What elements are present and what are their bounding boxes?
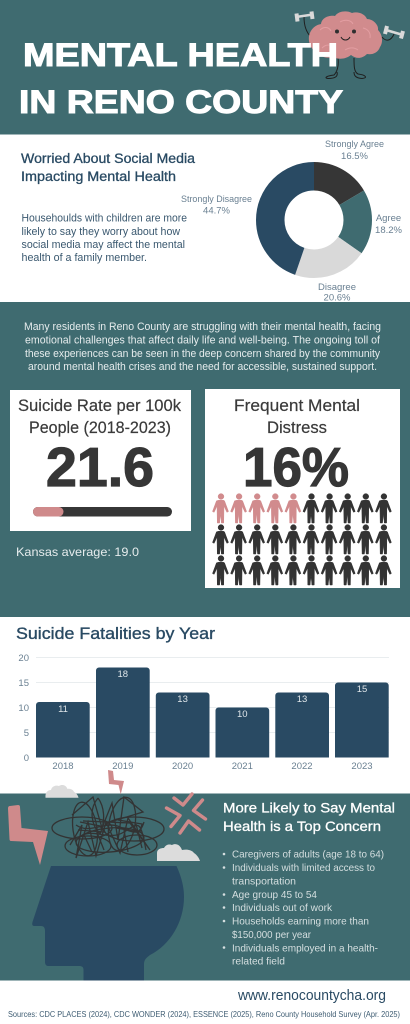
- Kansas average: Kansas average: 19.0: [16, 545, 139, 559]
- heading: top concern: More Likely to Say Mental: [223, 800, 395, 816]
- bar chart: 18: [118, 669, 128, 680]
- bar chart: [18, 653, 389, 772]
- intro paragraph: around mental health crises and the need for accessible, sustained support.: [28, 361, 377, 373]
- donut labels: Strongly Agree: [325, 139, 384, 150]
- website url: www.renocountycha.org: [237, 987, 386, 1004]
- bar chart: 20: [18, 653, 29, 664]
- panel: social media worry: [21, 139, 403, 304]
- donut labels: 18.2%: [375, 225, 403, 236]
- big number 16%: 16%: [243, 436, 349, 498]
- donut labels: [181, 139, 403, 304]
- progress bar: [33, 507, 172, 516]
- donut labels: Disagree: [318, 282, 356, 293]
- card: frequent mental distress: Frequent Mental: [234, 396, 360, 415]
- heading: social media: Impacting Mental Health: [21, 169, 176, 184]
- header band: [0, 0, 410, 134]
- bar chart: 2019: [112, 761, 133, 772]
- bar chart: 13: [297, 694, 307, 705]
- icon: head with scribble: [8, 770, 206, 980]
- intro paragraph: Many residents in Reno County are struggling with their mental health, facing: [24, 321, 381, 333]
- donut labels: 16.5%: [341, 151, 369, 162]
- bar chart: 10: [18, 703, 29, 714]
- pictogram: people: [212, 494, 391, 585]
- bulleted list: [223, 849, 384, 968]
- card: suicide rate: Suicide Rate per 100k: [18, 396, 181, 415]
- icon: brain with dumbbells: [296, 11, 403, 78]
- text: households with children: [22, 212, 187, 264]
- intro paragraph: [24, 321, 381, 373]
- head silhouette: [32, 866, 184, 980]
- bar chart: 2018: [52, 761, 74, 772]
- text: households with children: Househoulds with children are more: [22, 212, 187, 224]
- card: frequent mental distress: Distress: [267, 418, 327, 437]
- bar chart: 15: [18, 678, 29, 689]
- bar chart: 2021: [232, 761, 253, 772]
- icon: lightning top: [108, 770, 124, 794]
- card: frequent mental distress: [205, 389, 400, 588]
- heading: top concern: [223, 800, 395, 834]
- bar chart: 11: [58, 704, 68, 715]
- title: [19, 37, 343, 120]
- heading: social media: [21, 151, 196, 184]
- bulleted list: related field: [232, 956, 285, 968]
- bar chart: 2020: [172, 761, 193, 772]
- intro paragraph: these experiences can be seen in the deep concern shared by the community: [25, 348, 380, 360]
- heading: social media: Worried About Social Media: [21, 151, 196, 166]
- panel: top concern: [0, 770, 410, 980]
- bulleted list: Households earning more than: [232, 916, 369, 928]
- bulleted list: Age group 45 to 54: [232, 889, 317, 901]
- bulleted list: Individuals employed in a health-: [232, 942, 378, 954]
- donut chart: [270, 176, 358, 264]
- donut labels: 20.6%: [324, 292, 351, 304]
- intro paragraph: emotional challenges that affect daily life and well-being. The ongoing toll of: [25, 334, 381, 346]
- text: households with children: health of a family member.: [22, 252, 147, 264]
- card: suicide rate: [10, 390, 191, 531]
- bar chart: 2023: [351, 761, 373, 772]
- icon: cloud right: [157, 844, 200, 861]
- icon: cloud top: [45, 785, 78, 798]
- donut labels: Strongly Disagree: [181, 194, 252, 205]
- bar chart: 5: [24, 728, 29, 739]
- bulleted list: Caregivers of adults (age 18 to 64): [232, 849, 384, 861]
- bar chart: 15: [357, 684, 367, 695]
- text: households with children: social media may affect the mental: [22, 239, 185, 251]
- big number 21.6: 21.6: [46, 436, 154, 498]
- bar chart: 2022: [291, 761, 313, 772]
- bulleted list: Individuals out of work: [232, 902, 333, 914]
- panel: statistics: [0, 302, 410, 617]
- scribble: [52, 795, 164, 858]
- donut labels: 44.7%: [203, 206, 231, 216]
- card: suicide rate: People (2018-2023): [29, 418, 171, 437]
- panel: suicide fatalities by year: [16, 624, 389, 772]
- chart heading: Suicide Fatalities by Year: [16, 624, 215, 643]
- title: MENTAL HEALTH: [23, 37, 338, 73]
- bulleted list: transportation: [232, 876, 296, 888]
- text: households with children: likely to say they worry about how: [22, 226, 180, 238]
- title: IN RENO COUNTY: [19, 84, 343, 120]
- heading: top concern: Health is a Top Concern: [223, 818, 381, 834]
- bulleted list: $150,000 per year: [232, 929, 311, 941]
- bar chart: 0: [24, 753, 29, 764]
- bulleted list: Individuals with limited access to: [232, 862, 375, 874]
- bar chart: 10: [237, 709, 248, 720]
- bar chart: 13: [177, 694, 188, 705]
- donut labels: Agree: [376, 213, 401, 224]
- icon: anger mark: [166, 794, 206, 833]
- icon: lightning left: [8, 805, 48, 865]
